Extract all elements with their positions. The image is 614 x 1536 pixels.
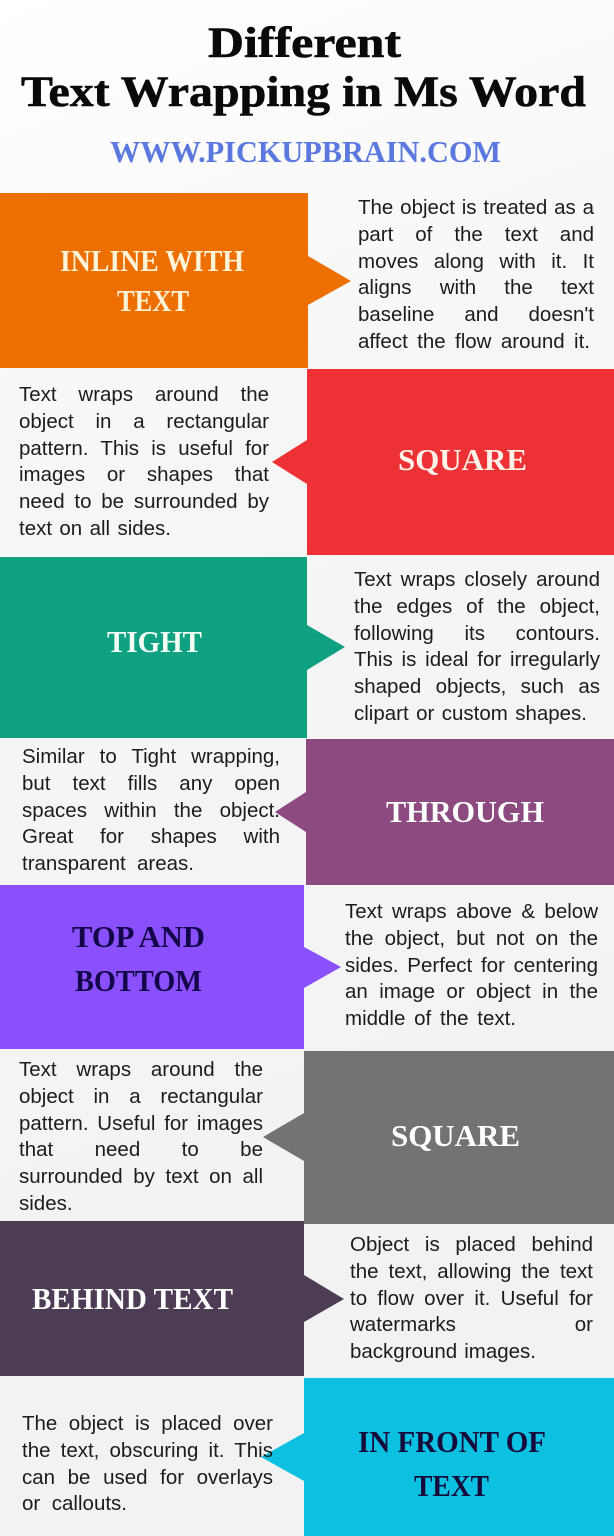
panel: tight: TIGHT [107, 624, 202, 659]
panel: in front of text [22, 1378, 614, 1536]
panel: inline with text: part of the text and [358, 223, 594, 246]
panel: behind text: background images. [350, 1340, 536, 1363]
panel: square: need to be surrounded by [19, 490, 269, 513]
panel: tight: Text wraps closely around [354, 568, 600, 591]
panel: tight: following its contours. [354, 622, 600, 645]
panel: square second: object in a rectangular [19, 1085, 263, 1108]
panel: inline with text: baseline and doesn't [358, 303, 594, 326]
panel: through: Great for shapes with [22, 825, 280, 848]
panel: through: but text fills any open [22, 772, 280, 795]
panel: square: Text wraps around the [19, 383, 269, 406]
panel: inline with text: aligns with the text [358, 276, 594, 299]
panel: through: transparent areas. [22, 852, 194, 875]
title: Text Wrapping in Ms Word [21, 69, 586, 116]
panel: behind text: watermarks or [350, 1313, 593, 1336]
panel: square second: pattern. Useful for images [19, 1112, 263, 1135]
panel: top and bottom: the object, but not on the [345, 927, 598, 950]
website url: WWW.PICKUPBRAIN.COM [110, 134, 501, 169]
title [21, 20, 586, 116]
panel: square: text on all sides. [19, 517, 171, 540]
panel: tight: This is ideal for irregularly [354, 648, 600, 671]
panel: behind text: the text, allowing the text [350, 1260, 593, 1283]
panel: tight: the edges of the object, [354, 595, 600, 618]
panel: square second [19, 1051, 614, 1224]
panel: square: object in a rectangular [19, 410, 269, 433]
panel: square second: sides. [19, 1192, 73, 1215]
panel: in front of text: IN FRONT OF [358, 1424, 546, 1459]
panel: inline with text: The object is treated as a [358, 196, 594, 219]
panel: square: pattern. This is useful for [19, 437, 269, 460]
panel: square: SQUARE [398, 442, 527, 477]
panel: through: Similar to Tight wrapping, [22, 745, 280, 768]
panel: square second: SQUARE [391, 1118, 520, 1153]
panel: square second: surrounded by text on all [19, 1165, 263, 1188]
panel: inline with text: moves along with it. It [358, 250, 594, 273]
panel: square [19, 369, 614, 555]
panel: in front of text: The object is placed over [22, 1412, 273, 1435]
panel: in front of text: can be used for overlays [22, 1466, 273, 1489]
panel: inline with text: TEXT [117, 283, 189, 318]
panel: square second: Text wraps around the [19, 1058, 263, 1081]
panel: behind text: Object is placed behind [350, 1233, 593, 1256]
panel: top and bottom: sides. Perfect for centering [345, 954, 598, 977]
panel: through: THROUGH [386, 794, 544, 829]
panel: top and bottom: middle of the text. [345, 1007, 516, 1030]
panel: tight: shaped objects, such as [354, 675, 600, 698]
panel: square: images or shapes that [19, 463, 269, 486]
panel: inline with text: INLINE WITH [60, 243, 244, 278]
title: Different [208, 20, 402, 67]
panel: through: spaces within the object. [22, 799, 280, 822]
panel: in front of text: the text, obscuring it. This [22, 1439, 273, 1462]
panel: behind text: to flow over it. Useful for [350, 1287, 593, 1310]
panel: top and bottom: TOP AND [72, 919, 205, 954]
panel: top and bottom: BOTTOM [75, 963, 202, 998]
panel: tight: clipart or custom shapes. [354, 702, 587, 725]
panel: inline with text: affect the flow around it. [358, 330, 590, 353]
panel: top and bottom: an image or object in the [345, 980, 598, 1003]
panel: tight [0, 557, 600, 738]
panel: through [22, 739, 614, 885]
panel: square second: that need to be [19, 1138, 263, 1161]
panel: top and bottom: Text wraps above & below [345, 900, 598, 923]
panel: behind text [0, 1221, 593, 1376]
panel: in front of text: TEXT [414, 1468, 489, 1503]
panel: inline with text [0, 193, 594, 368]
panel: in front of text: or callouts. [22, 1492, 127, 1515]
panel: behind text: BEHIND TEXT [32, 1281, 233, 1316]
panel: top and bottom [0, 885, 598, 1049]
